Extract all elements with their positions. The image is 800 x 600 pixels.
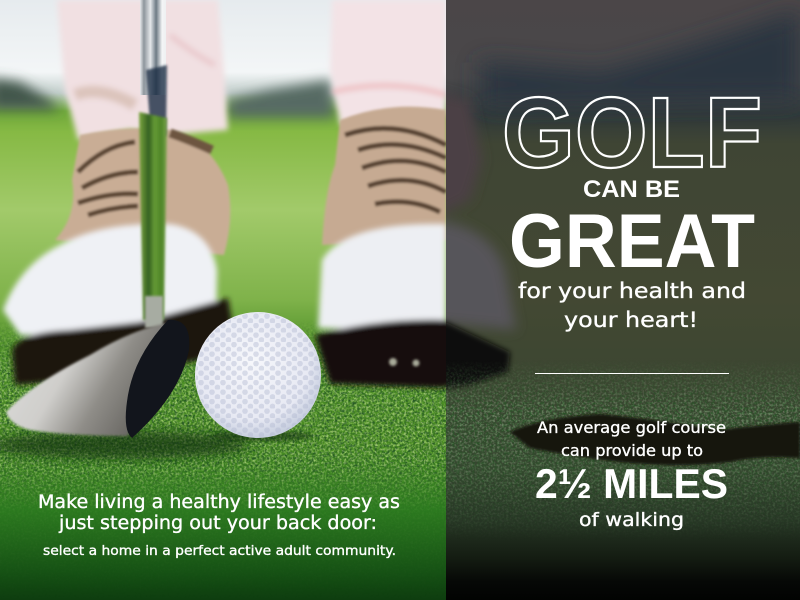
sky, fairway and green backdrop: [0, 0, 446, 600]
stat: walking distance: of walking: [579, 509, 684, 531]
right shoe: [312, 105, 446, 392]
putter head shadow: [0, 431, 250, 459]
background hills: [0, 78, 335, 118]
stat: walking distance: can provide up to: [561, 441, 703, 460]
panel: golf photo: [0, 0, 446, 600]
club shaft: [139, 0, 167, 328]
text block: left message: select a home in a perfect active adult community.: [43, 544, 396, 559]
text block: left message: Make living a healthy lifestyle easy as: [38, 492, 400, 513]
subheading: health and heart: [518, 279, 746, 332]
divider: [535, 373, 729, 374]
left shoe: [3, 128, 232, 385]
turf texture: [446, 360, 800, 540]
subheading: health and heart: for your health and: [518, 279, 746, 303]
putter head: [6, 320, 189, 438]
text block: left message: [38, 492, 400, 559]
blurred shoe silhouette: [446, 96, 518, 334]
left leg trousers: [57, 0, 228, 140]
shoe sole silhouette: [446, 319, 513, 391]
heading: GOLF: GOLF: [502, 77, 762, 189]
panel: dark overlay photo: [430, 0, 800, 600]
divot: [510, 414, 800, 465]
stat: walking distance: An average golf course: [537, 418, 726, 437]
right leg trousers: [330, 0, 446, 125]
subheading: health and heart: your heart!: [564, 308, 698, 332]
heading: CAN BE: CAN BE: [583, 176, 680, 203]
text block: left message: just stepping out your back door:: [58, 513, 377, 534]
stat: walking distance: [535, 418, 728, 531]
golf ball: [195, 312, 321, 441]
blurred hill: [480, 10, 800, 105]
stat: walking distance: 2½ MILES: [535, 460, 728, 507]
grass texture: [0, 328, 446, 510]
sole spikes: [389, 358, 420, 366]
heading: GREAT: GREAT: [509, 199, 755, 284]
